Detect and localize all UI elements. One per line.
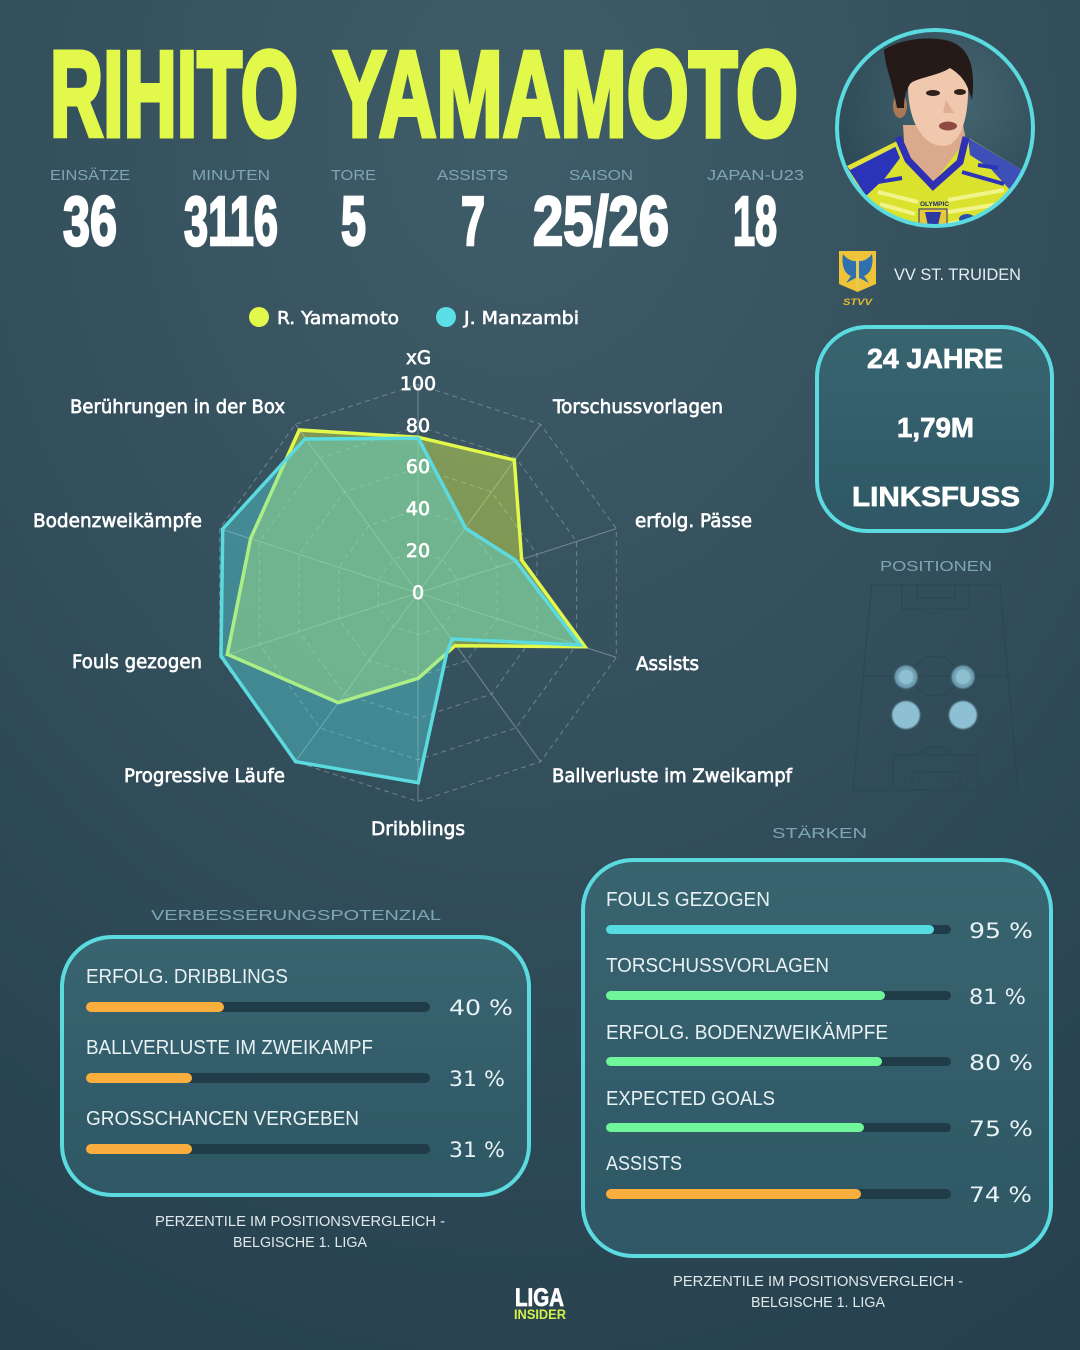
series: R. Yamamoto <box>227 430 585 703</box>
bar: Fouls gezogen: 95 % <box>969 919 1033 943</box>
stat: Einsätze: 36 <box>63 182 117 260</box>
bar: Fouls gezogen: FOULS GEZOGEN <box>606 889 770 911</box>
radar axis labels: Progressive Läufe <box>124 765 285 787</box>
stat: Assists <box>437 167 508 260</box>
bar: Ballverluste im Zweikampf: BALLVERLUSTE IM ZWEIKAMPF <box>86 1037 373 1059</box>
bar: Torschussvorlagen: TORSCHUSSVORLAGEN <box>606 955 829 977</box>
bar: Erfolg. Dribblings <box>86 966 513 1020</box>
radar scale ticks: 20 <box>406 540 430 562</box>
bar: Erfolg. Dribblings: ERFOLG. DRIBBLINGS <box>86 966 288 988</box>
heading: Stärken: STÄRKEN <box>772 825 867 842</box>
bar: Ballverluste im Zweikampf <box>86 1037 505 1091</box>
stat: Tore: 5 <box>341 182 366 260</box>
title <box>50 26 798 162</box>
bar: Großchancen vergeben: GROSSCHANCEN VERGEBEN <box>86 1108 359 1130</box>
radar scale ticks: 100 <box>400 373 436 395</box>
bar: Erfolg. Bodenzweikämpfe: ERFOLG. BODENZWEIKÄMPFE <box>606 1022 888 1044</box>
radar scale ticks: 0 <box>412 582 424 604</box>
radar scale ticks: 40 <box>406 498 430 520</box>
radar axis labels <box>33 347 793 840</box>
radar scale ticks <box>400 373 436 604</box>
radar chart <box>33 347 793 840</box>
bar: Torschussvorlagen <box>606 955 1026 1009</box>
stat: Assists: ASSISTS <box>437 167 508 184</box>
stat: Saison <box>533 167 669 260</box>
stat: Einsätze: EINSÄTZE <box>50 167 130 184</box>
bar: Assists: ASSISTS <box>606 1153 682 1175</box>
logo: Liga Insider: LIGA <box>515 1284 564 1312</box>
bar: Torschussvorlagen: 81 % <box>969 985 1026 1009</box>
stat: Saison: SAISON <box>569 167 633 184</box>
footnote: left: BELGISCHE 1. LIGA <box>233 1234 367 1251</box>
bar: Großchancen vergeben: 31 % <box>449 1138 505 1162</box>
heading: Verbesserungspotenzial: VERBESSERUNGSPOTENZIAL <box>151 907 441 924</box>
player photo: OLYMPIC <box>920 201 949 208</box>
info panel <box>817 327 1052 531</box>
legend: R. Yamamoto <box>277 308 399 329</box>
radar axis labels: Assists <box>636 653 699 675</box>
stat: Tore <box>331 167 376 260</box>
stat: Japan-U23: JAPAN-U23 <box>707 167 804 184</box>
player photo <box>835 30 1035 240</box>
club badge and name: VV ST. TRUIDEN <box>894 265 1021 284</box>
stat: Assists: 7 <box>461 182 485 260</box>
bar: Assists: 74 % <box>969 1183 1032 1207</box>
bar: Großchancen vergeben <box>86 1108 505 1162</box>
radar scale ticks: 60 <box>406 456 430 478</box>
bar: Assists <box>606 1153 1032 1207</box>
bar: Expected Goals <box>606 1088 1033 1141</box>
stat: Minuten <box>184 167 278 260</box>
bar: Expected Goals: EXPECTED GOALS <box>606 1088 775 1110</box>
positions heading: POSITIONEN <box>880 558 992 575</box>
radar axis labels: Fouls gezogen <box>72 651 202 673</box>
title: YAMAMOTO <box>333 26 798 162</box>
footnote: left <box>155 1213 445 1251</box>
series: J. Manzambi <box>221 438 580 783</box>
radar axis labels: Ballverluste im Zweikampf <box>552 765 793 787</box>
bar: Erfolg. Dribblings: 40 % <box>449 996 513 1020</box>
footnote: right: BELGISCHE 1. LIGA <box>751 1294 885 1311</box>
stat: Tore: TORE <box>331 167 376 184</box>
radar axis labels: Torschussvorlagen <box>552 396 723 418</box>
radar axis labels: Bodenzweikämpfe <box>33 510 202 532</box>
position pitch <box>853 585 1018 790</box>
footnote: right: PERZENTILE IM POSITIONSVERGLEICH - <box>673 1273 963 1290</box>
bar: Ballverluste im Zweikampf: 31 % <box>449 1067 505 1091</box>
stat: Einsätze <box>50 167 130 260</box>
title: RIHITO <box>50 26 298 162</box>
bar: Fouls gezogen <box>606 889 1033 943</box>
stats row <box>50 167 804 260</box>
stat: Minuten: 3116 <box>184 182 278 260</box>
logo: Liga Insider: INSIDER <box>514 1307 566 1322</box>
radar axis labels: Berührungen in der Box <box>70 396 285 418</box>
radar axis labels: Dribblings <box>371 818 465 840</box>
footnote: right <box>673 1273 963 1311</box>
bar: Erfolg. Bodenzweikämpfe: 80 % <box>969 1051 1033 1075</box>
stat: Saison: 25/26 <box>533 182 669 260</box>
panel: Stärken <box>583 860 1051 1256</box>
info panel: 24 JAHRE <box>867 343 1003 374</box>
logo: Liga Insider <box>514 1284 566 1322</box>
radar axis labels: xG <box>406 347 431 369</box>
icon: STVV crest: STVV <box>843 297 873 307</box>
stat: Minuten: MINUTEN <box>192 167 270 184</box>
stat: Japan-U23 <box>707 167 804 260</box>
radar scale ticks: 80 <box>406 415 430 437</box>
info panel: 1,79M <box>897 412 974 443</box>
radar axis labels: erfolg. Pässe <box>635 510 752 532</box>
info panel: LINKSFUSS <box>852 481 1020 512</box>
icon: STVV crest <box>839 251 876 307</box>
position markers <box>892 666 977 729</box>
bar: Erfolg. Bodenzweikämpfe <box>606 1022 1033 1075</box>
legend <box>249 307 579 329</box>
stat: Japan-U23: 18 <box>733 182 777 260</box>
footnote: left: PERZENTILE IM POSITIONSVERGLEICH - <box>155 1213 445 1230</box>
bar: Expected Goals: 75 % <box>969 1117 1033 1141</box>
club badge and name <box>839 251 1021 307</box>
panel: Verbesserungspotenzial <box>62 937 529 1195</box>
legend: J. Manzambi <box>463 308 579 329</box>
